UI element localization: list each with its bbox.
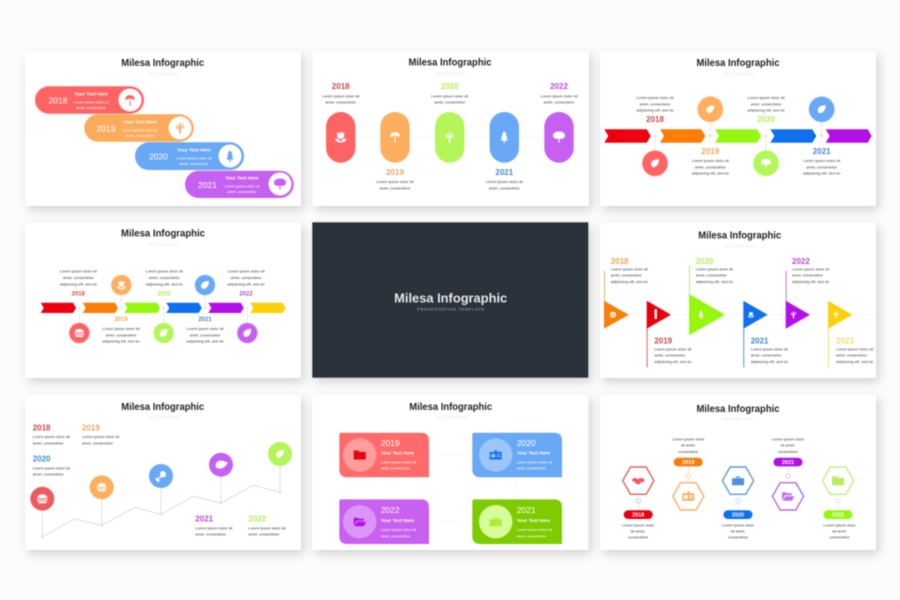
flag: 2023: Lorem ipsum dolor sit (836, 346, 874, 351)
card: 2019: 2019 (381, 438, 400, 448)
step: 2022: 2022 (239, 292, 253, 298)
card: 2022 (339, 499, 429, 544)
card: 2021: Your Text Here (517, 518, 550, 524)
flag: 2022: adipiscing elit, sed do (792, 279, 829, 284)
text: 2018: 2018 (33, 424, 51, 432)
heading: panel 9 title: Milesa Infographic (696, 404, 780, 415)
pill: 2021 (185, 171, 294, 198)
pill: 2021: Your Text Here (225, 176, 259, 182)
flag: 2023 (828, 301, 874, 367)
step: 2021: amet, consectetur (806, 164, 838, 169)
capsule: 2020 (431, 82, 469, 163)
subtitle: panel 7: Your Text Here (147, 414, 179, 420)
hexagon: 2019: consectetur (678, 449, 699, 454)
panel: flags (600, 222, 876, 378)
hexagon: 2021: sit amet, (781, 443, 795, 448)
capsule: 2020: amet, consectetur (434, 100, 466, 105)
step: 2019: adipiscing elit, sed do (692, 171, 729, 176)
card: 2021: amet, consectetur (517, 534, 547, 538)
step: 2020: amet, consectetur (751, 101, 782, 106)
marker: 2018 (30, 487, 54, 537)
step: 2020: Lorem ipsum dolor sit (146, 269, 184, 274)
hexagon: 2020 (722, 467, 755, 540)
flag: 2021: adipiscing elit, sed do (751, 359, 788, 364)
text: 2022: amet, consectetur (248, 531, 280, 536)
card: 2022: Lorem ipsum dolor sit (381, 528, 416, 532)
subtitle: panel 9: Your Text Here (722, 416, 754, 422)
hexagon: 2021 (772, 436, 805, 510)
text: 2022: Lorem ipsum dolor sit (248, 525, 286, 530)
capsule: 2018 (322, 82, 360, 163)
flag: 2019: adipiscing elit, sed do (654, 359, 692, 364)
flag: 2020: adipiscing elit, sed do (696, 279, 733, 284)
step: 2020: 2020 (757, 115, 775, 124)
pill: 2019: amet, consectetur (125, 134, 155, 138)
capsule: 2021 (486, 112, 524, 190)
step: 2018 (636, 95, 675, 176)
subtitle: panel 3: Your Text Here (722, 72, 754, 76)
panel: stacked pills (25, 51, 301, 206)
step: 2021 (186, 275, 225, 344)
pill: 2018: Lorem ipsum dolor sit (73, 100, 109, 104)
arrows row (604, 129, 872, 143)
hexagon: 2021: consectetur (778, 449, 799, 454)
step: 2018: Lorem ipsum dolor sit (60, 269, 98, 274)
hexagon: 2019: sit amet, (681, 443, 696, 448)
hexagon: 2020: Lorem ipsum dolor (722, 522, 755, 527)
flag: 2018: amet, consectetur (611, 273, 642, 278)
hexagon: 2022 (822, 467, 856, 540)
hexagon: 2021: Lorem ipsum dolor (772, 436, 805, 441)
card: 2019: Lorem ipsum dolor sit (381, 460, 416, 464)
text: 2019: Lorem ipsum dolor sit (82, 434, 120, 439)
pill: 2021: 2021 (198, 180, 217, 190)
text: 2021: 2021 (195, 514, 214, 524)
line chart path (41, 485, 281, 538)
card: 2022: amet, consectetur (381, 534, 411, 538)
flag: 2019: Lorem ipsum dolor sit (654, 346, 692, 351)
step: 2021 (803, 97, 841, 176)
text: 2019: amet, consectetur (82, 440, 114, 445)
marker: 2021 (209, 453, 233, 503)
step: 2019: 2019 (701, 147, 720, 156)
subtitle: panel 1: Your Text Here (147, 72, 179, 76)
step: 2020 (146, 269, 184, 343)
pill: 2021: Lorem ipsum dolor sit (224, 184, 260, 188)
capsule: 2018: Lorem ipsum dolor sit (322, 94, 360, 99)
step: 2018: adipiscing elit, sed do (636, 108, 674, 112)
step: 2019 (102, 275, 141, 344)
pill: 2019: 2019 (97, 123, 116, 133)
marker: 2020 (149, 464, 173, 514)
hexagon: 2019: 2019 (682, 460, 694, 466)
flag: 2018 (604, 257, 649, 329)
text: 2018: Lorem ipsum dolor sit (33, 434, 71, 439)
card: 2020: Your Text Here (517, 451, 550, 457)
panel: four cards (312, 394, 588, 550)
flag: 2022 (786, 257, 830, 329)
capsule: 2018: 2018 (332, 82, 350, 91)
text: 2019 (82, 424, 120, 445)
flag: 2022: Lorem ipsum dolor sit (792, 266, 830, 271)
step: 2019: Lorem ipsum dolor sit (692, 158, 730, 163)
card: 2021 (472, 499, 562, 544)
flag: 2018: 2018 (611, 257, 629, 266)
cover subtitle: PRESENTATION TEMPLATE (417, 307, 485, 312)
heading: panel 2 title: Milesa Infographic (408, 58, 492, 68)
text: 2018: amet, consectetur (33, 440, 64, 445)
text: 2021: Lorem ipsum dolor sit (195, 525, 233, 530)
card: 2021: Lorem ipsum dolor sit (517, 528, 552, 532)
hexagon: 2022: consectetur (829, 535, 850, 540)
pill: 2018: Your Text Here (74, 91, 108, 97)
step: 2021: adipiscing elit, sed do (803, 171, 840, 176)
flag: 2023: 2023 (836, 336, 854, 346)
text: 2020: Lorem ipsum dolor sit (33, 465, 71, 470)
step: 2020: amet, consectetur (149, 275, 180, 280)
step: 2018: Lorem ipsum dolor sit (636, 95, 675, 100)
card: 2019: Your Text Here (381, 451, 414, 457)
step: 2018: adipiscing elit, sed do (60, 281, 97, 286)
step: 2020: Lorem ipsum dolor sit (747, 95, 786, 100)
hexagon: 2018: consectetur (628, 535, 649, 540)
pill: 2020 (135, 142, 244, 170)
flag: 2021: amet, consectetur (751, 353, 782, 358)
panel: hexagons (600, 394, 876, 550)
hexagon: 2019 (672, 436, 705, 510)
cover title: Milesa Infographic (394, 291, 507, 305)
hexagon: 2020: consectetur (728, 535, 749, 540)
hexagon: 2018: sit amet, (631, 528, 645, 533)
step: 2018: 2018 (646, 115, 664, 124)
step: 2022: amet, consectetur (231, 275, 262, 280)
panel: arrow timeline 6 steps (25, 222, 301, 378)
hexagon: 2020: 2020 (732, 513, 744, 519)
hexagon: 2018: Lorem ipsum dolor (622, 522, 655, 527)
pill: 2020: Lorem ipsum dolor sit (176, 156, 212, 160)
flag: 2023: adipiscing elit, sed do (836, 359, 873, 364)
flag: 2021 (743, 301, 789, 367)
hexagon: 2022: 2022 (832, 513, 844, 519)
step: 2019: adipiscing elit, sed do (102, 339, 140, 344)
step: 2021: Lorem ipsum dolor sit (803, 158, 841, 163)
hexagon: 2020: sit amet, (731, 528, 745, 533)
heading: panel 7 title: Milesa Infographic (121, 402, 205, 413)
hexagon: 2019: Lorem ipsum dolor (672, 436, 705, 441)
step: 2018: amet, consectetur (640, 101, 671, 106)
subtitle: panel 4: Your Text Here (147, 242, 179, 247)
card: 2019: amet, consectetur (381, 467, 411, 471)
step: 2021: adipiscing elit, sed do (186, 339, 224, 344)
step: 2020: 2020 (158, 292, 172, 298)
subtitle: panel 2: Your Text Here (434, 71, 466, 76)
capsule: 2021: amet, consectetur (489, 185, 520, 190)
capsule: 2019: 2019 (386, 168, 404, 177)
heading: panel 4 title: Milesa Infographic (121, 229, 205, 240)
panel: dark cover (312, 222, 588, 378)
capsule: 2020: 2020 (441, 82, 459, 91)
hexagon: 2022: sit amet, (832, 528, 847, 533)
marker: 2019 (90, 475, 114, 525)
pill: 2019 (84, 114, 194, 142)
flag: 2020: 2020 (696, 257, 714, 266)
capsule: 2022: 2022 (550, 82, 568, 91)
capsule: 2020: Lorem ipsum dolor sit (431, 94, 469, 99)
text: 2020: 2020 (33, 454, 51, 464)
flag: 2019: amet, consectetur (654, 353, 686, 358)
step: 2020 (747, 95, 786, 176)
panel: rising line (25, 394, 301, 550)
capsule: 2019 (376, 112, 415, 190)
pill: 2021: amet, consectetur (227, 190, 257, 194)
capsule: 2022: amet, consectetur (544, 100, 575, 105)
card: 2022: 2022 (381, 505, 400, 515)
pill: 2020: 2020 (149, 152, 168, 162)
text: 2022: 2022 (248, 514, 267, 524)
step: 2021: 2021 (198, 317, 212, 323)
text: 2020: amet, consectetur (33, 471, 64, 476)
step: 2019: Lorem ipsum dolor sit (102, 326, 141, 331)
capsule: 2021: 2021 (495, 168, 514, 177)
step: 2019 (692, 97, 730, 176)
subtitle: panel 8: Your Text Here (435, 414, 467, 420)
card: 2020: 2020 (517, 438, 536, 448)
panel: arrow timeline 5 steps (600, 51, 876, 206)
pill: 2020: Your Text Here (177, 148, 211, 154)
step: 2022 (227, 269, 266, 343)
flag: 2021: 2021 (751, 336, 769, 346)
heading: panel 8 title: Milesa Infographic (409, 402, 493, 413)
step: 2022: adipiscing elit, sed do (227, 281, 265, 286)
capsule: 2019: Lorem ipsum dolor sit (376, 179, 415, 184)
capsule: 2019: amet, consectetur (380, 185, 411, 190)
pill: 2018: amet, consectetur (76, 106, 106, 110)
text: 2021 (195, 514, 233, 536)
capsule: 2022 (540, 82, 579, 163)
step: 2021: 2021 (813, 147, 831, 156)
capsule: 2021: Lorem ipsum dolor sit (486, 179, 524, 184)
pill: 2019: Lorem ipsum dolor sit (122, 128, 158, 132)
text: 2021: amet, consectetur (195, 531, 227, 536)
step: 2018: 2018 (72, 292, 86, 298)
step: 2018 (60, 269, 98, 343)
subtitle: panel 6: Your Text Here (724, 244, 756, 248)
flag: 2018: adipiscing elit, sed do (611, 279, 648, 284)
marker: 2022 (268, 442, 292, 492)
pill: 2020: amet, consectetur (179, 162, 209, 166)
hexagon: 2021: 2021 (782, 460, 794, 466)
text: 2020 (33, 454, 71, 476)
flag: 2019: 2019 (654, 336, 673, 346)
flag: 2022: amet, consectetur (792, 273, 824, 278)
card: 2020 (472, 433, 562, 477)
flag: 2020: Lorem ipsum dolor sit (696, 266, 734, 271)
step: 2020: adipiscing elit, sed do (146, 281, 183, 286)
flag: 2018: Lorem ipsum dolor sit (611, 266, 649, 271)
heading: panel 1 title: Milesa Infographic (121, 58, 205, 69)
heading: panel 3 title: Milesa Infographic (696, 58, 780, 69)
step: 2022: Lorem ipsum dolor sit (227, 269, 266, 274)
step: 2018: amet, consectetur (63, 275, 94, 280)
text: 2022 (248, 514, 286, 536)
flag: 2021: Lorem ipsum dolor sit (751, 346, 789, 351)
hexagon: 2018 (622, 467, 655, 540)
panel: capsules (312, 51, 589, 206)
flag: 2022: 2022 (792, 257, 810, 266)
flag: 2019 (647, 301, 692, 367)
step: 2021: Lorem ipsum dolor sit (186, 326, 225, 331)
capsule: 2018: amet, consectetur (325, 100, 357, 105)
card: 2021: 2021 (517, 505, 536, 515)
flag: 2023: amet, consectetur (836, 353, 868, 358)
pill: 2018 (35, 86, 144, 114)
card: 2020: Lorem ipsum dolor sit (517, 460, 552, 464)
pill: 2019: Your Text Here (123, 120, 157, 126)
heading: panel 6 title: Milesa Infographic (698, 230, 782, 242)
step: 2019: 2019 (114, 317, 128, 323)
flag: 2020: amet, consectetur (696, 273, 727, 278)
step: 2019: amet, consectetur (695, 164, 726, 169)
text: 2019: 2019 (82, 424, 100, 432)
pill: 2018: 2018 (49, 95, 68, 105)
text: 2018 (33, 424, 71, 445)
card: 2020: amet, consectetur (517, 467, 547, 471)
hexagon: 2018: 2018 (632, 513, 644, 519)
card: 2019 (339, 433, 429, 477)
flag: 2020 (689, 257, 734, 335)
card: 2022: Your Text Here (381, 518, 414, 524)
step: 2020: adipiscing elit, sed do (747, 108, 785, 112)
step: 2019: amet, consectetur (106, 332, 137, 337)
capsule: 2022: Lorem ipsum dolor sit (540, 94, 579, 99)
hexagon: 2022: Lorem ipsum dolor (823, 522, 856, 527)
arrows row (41, 303, 286, 313)
step: 2021: amet, consectetur (190, 332, 221, 337)
